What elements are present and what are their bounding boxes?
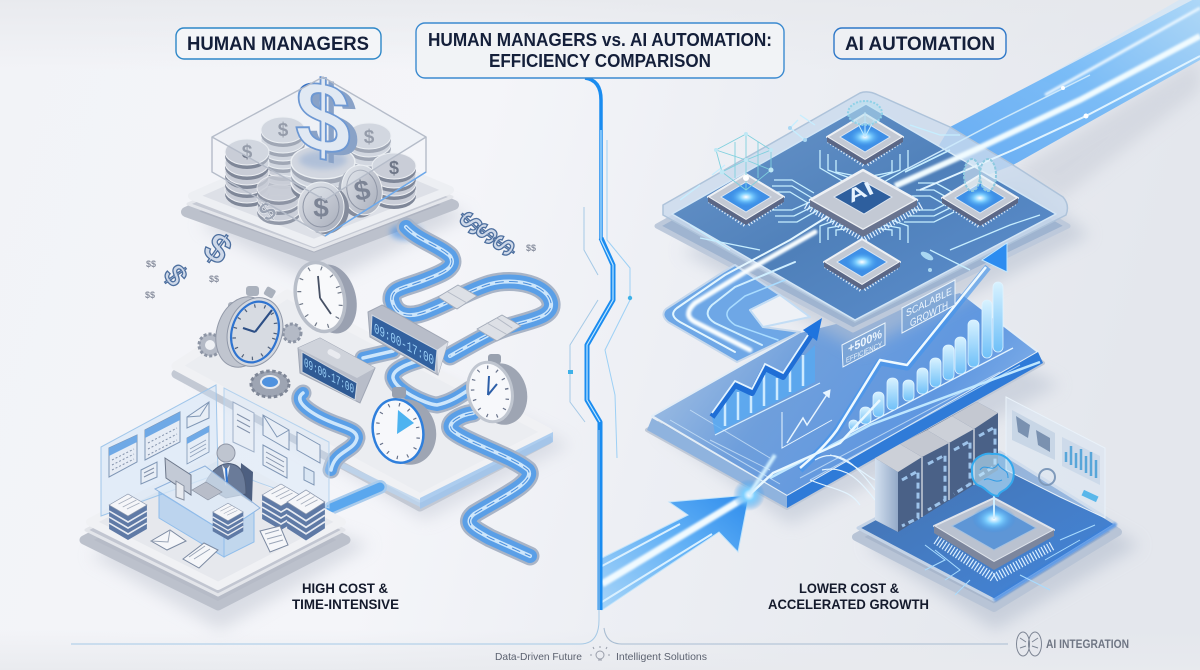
icon: stopwatch blue wedge — [367, 387, 442, 470]
icon: stopwatch and gears — [199, 286, 301, 374]
coin stacks: $ — [278, 120, 289, 141]
platform: server and analytics — [856, 452, 1140, 630]
footer: tagline: Data-Driven Future — [495, 651, 582, 663]
label: +500% efficiency: +500% — [848, 327, 882, 356]
heading: human managers: HUMAN MANAGERS — [187, 33, 369, 55]
platform: coins base — [186, 138, 470, 285]
chip: top — [827, 114, 903, 165]
coin stacks: $ — [253, 194, 282, 228]
small dollar icons: $ — [486, 229, 523, 262]
chip: right — [942, 175, 1018, 226]
heading: AI automation — [834, 28, 1006, 59]
standing coin front — [298, 182, 349, 234]
label: +500% efficiency — [842, 323, 885, 367]
caption: high cost: TIME-INTENSIVE — [292, 596, 399, 612]
icon: big dollar sign: $ — [295, 58, 351, 179]
label: scalable growth: SCALABLE — [906, 286, 952, 320]
beam: top right data stream — [900, 0, 1200, 210]
platform: growth charts — [647, 292, 1060, 525]
small dollar icons: $$ — [146, 259, 156, 269]
label: scalable growth: GROWTH — [910, 300, 948, 330]
icon: brain hologram right — [964, 159, 996, 191]
flow band looping around cutout — [663, 215, 830, 362]
caption: high cost — [292, 580, 399, 612]
winding process road — [300, 224, 551, 556]
standing coin right — [333, 161, 387, 221]
beam: bright core lines — [895, 36, 1200, 190]
coin stacks — [225, 117, 416, 234]
glass wall panels — [101, 385, 329, 516]
icon: light bulb — [590, 646, 610, 660]
icon: stopwatch right — [462, 354, 533, 430]
central divider line — [71, 78, 1008, 644]
server racks — [875, 402, 998, 532]
icon: neural network hologram — [714, 132, 774, 190]
chip: central AI — [806, 170, 922, 238]
heading: AI automation: AI AUTOMATION — [845, 33, 995, 55]
chart: growth bars and arrow — [770, 243, 1040, 478]
icon: digital clock upper — [368, 305, 448, 375]
footer: tagline — [495, 646, 707, 663]
small dollar icons: $ — [156, 258, 195, 292]
chip: bottom — [824, 239, 900, 290]
envelopes and loose papers — [151, 526, 288, 568]
title: HUMAN MANAGERS vs. AI AUTOMATION: — [428, 30, 772, 50]
platform: middle timekeeping — [176, 294, 570, 520]
glass case — [212, 77, 426, 236]
label: +500% efficiency: EFFICIENCY — [846, 340, 883, 365]
platform: circuit board — [657, 92, 1090, 350]
coin stacks: $ — [389, 158, 399, 178]
icon: floor gear — [251, 371, 289, 397]
small dollar icons: $ — [469, 217, 505, 251]
icon: digital clock lower — [298, 338, 375, 403]
icon: glowing brain — [972, 454, 1014, 496]
caption: lower cost: ACCELERATED GROWTH — [768, 596, 929, 612]
title: EFFICIENCY COMPARISON — [489, 51, 711, 71]
panel: human managers — [84, 58, 570, 630]
processor chip with brain — [934, 496, 1054, 578]
icon: wall clock — [288, 257, 364, 339]
chip: central AI: AI — [843, 177, 877, 207]
small dollar icons: $ — [196, 224, 239, 273]
caption: high cost: HIGH COST & — [302, 580, 388, 596]
small dollar icons: $$ — [526, 243, 536, 253]
small dollar icons — [145, 204, 536, 300]
standing coin front: $ — [313, 192, 329, 223]
road connectors — [438, 285, 521, 341]
small dollar icons: $$ — [209, 274, 219, 284]
icon: big dollar sign: $ — [303, 61, 359, 182]
white cutout — [750, 295, 810, 327]
chart: rising arrow — [712, 318, 822, 435]
icon: manager at desk — [155, 444, 260, 557]
icon: calendars and documents — [109, 402, 320, 485]
icon: brain hologram top — [848, 101, 882, 137]
heading: human managers — [176, 28, 381, 59]
caption: lower cost — [768, 580, 929, 612]
small dollar icons: $ — [452, 204, 490, 242]
coin stacks: $ — [364, 127, 375, 148]
circuit traces — [680, 115, 1040, 270]
big blue arrow — [602, 400, 880, 610]
caption: lower cost: LOWER COST & — [799, 580, 899, 596]
icon: digital clock upper: 09:00-17:00 — [374, 320, 434, 370]
paper stacks — [109, 484, 325, 540]
label: scalable growth — [902, 280, 955, 333]
title — [416, 23, 784, 78]
platform: desk workspace — [84, 456, 370, 630]
small dollar icons: $$ — [145, 290, 155, 300]
chart: small line — [782, 390, 832, 448]
standing coin right: $ — [351, 174, 373, 207]
panel: AI automation — [602, 0, 1200, 630]
icon: digital clock lower: 09:00-17:00 — [304, 356, 354, 398]
chip: left — [708, 174, 784, 225]
footer: tagline: Intelligent Solutions — [616, 651, 707, 663]
holographic analytics panel — [1006, 397, 1105, 518]
flow lines into server — [810, 455, 875, 505]
badge: AI integration: AI INTEGRATION — [1046, 637, 1129, 651]
coin stacks: $ — [242, 142, 253, 163]
badge: AI integration — [1016, 632, 1129, 656]
